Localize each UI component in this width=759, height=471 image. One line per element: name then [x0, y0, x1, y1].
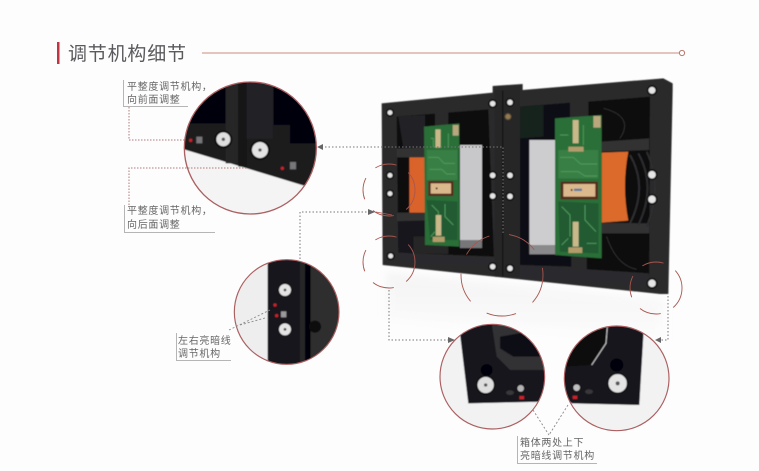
leader: left-right seam label to inset — [229, 310, 270, 330]
title rule with end dot — [202, 50, 685, 56]
inset circle: flatness adjustment — [183, 77, 320, 217]
label: flatness adjustment backward: 平整度调节机构， — [127, 204, 213, 217]
arrow: lower left corner to inset — [389, 290, 455, 343]
inset circle: bottom right corner adjustment — [563, 325, 670, 432]
label: flatness adjustment backward — [124, 204, 215, 232]
label: flatness adjustment forward: 向前面调整 — [127, 93, 180, 106]
leader: front adjustment label to inset — [129, 107, 185, 140]
label: top-bottom seam adjustment — [518, 436, 597, 464]
label: left-right seam adjustment: 调节机构 — [178, 347, 221, 360]
leader: bottom label to insets — [533, 405, 568, 435]
silver power supply left — [460, 145, 482, 248]
label: top-bottom seam adjustment: 箱体两处上下 — [520, 436, 584, 449]
arrow: lower right corner to inset — [655, 296, 668, 343]
brass connector — [505, 114, 511, 120]
detail marker: lower right corner — [630, 262, 682, 314]
cabinet window: right — [587, 97, 650, 276]
cabinet window: middle — [520, 103, 571, 267]
detail marker: upper left edge — [363, 164, 415, 216]
green circuit board left — [424, 123, 459, 247]
label: flatness adjustment forward: 平整度调节机构， — [127, 80, 213, 93]
inset circle: left-right seam adjustment — [233, 258, 341, 365]
label: top-bottom seam adjustment: 亮暗线调节机构 — [520, 449, 595, 462]
frame details — [397, 90, 655, 287]
inset circle: bottom left corner adjustment — [438, 320, 547, 430]
green circuit board right — [555, 115, 602, 258]
arrow: left-right inset to cabinet — [300, 209, 392, 259]
detail marker: lower left corner — [363, 236, 415, 288]
leader: rear adjustment label to inset — [129, 168, 248, 205]
label: left-right seam adjustment: 左右亮暗线 — [178, 334, 232, 347]
title: 调节机构细节 — [68, 43, 187, 65]
cabinet frame — [382, 78, 673, 294]
cabinet window: left — [397, 109, 494, 257]
mounting bolts — [387, 86, 657, 288]
LED cabinet back view — [382, 78, 673, 294]
label: flatness adjustment forward — [124, 80, 213, 106]
detail marker: bottom centre — [461, 234, 543, 316]
silver power supply right — [529, 140, 558, 254]
orange thermal pads — [409, 152, 628, 223]
arrow: cabinet to flatness inset — [317, 144, 503, 233]
label: flatness adjustment backward: 向后面调整 — [127, 218, 180, 231]
label: left-right seam adjustment — [176, 333, 232, 360]
panel reflection — [386, 272, 664, 345]
